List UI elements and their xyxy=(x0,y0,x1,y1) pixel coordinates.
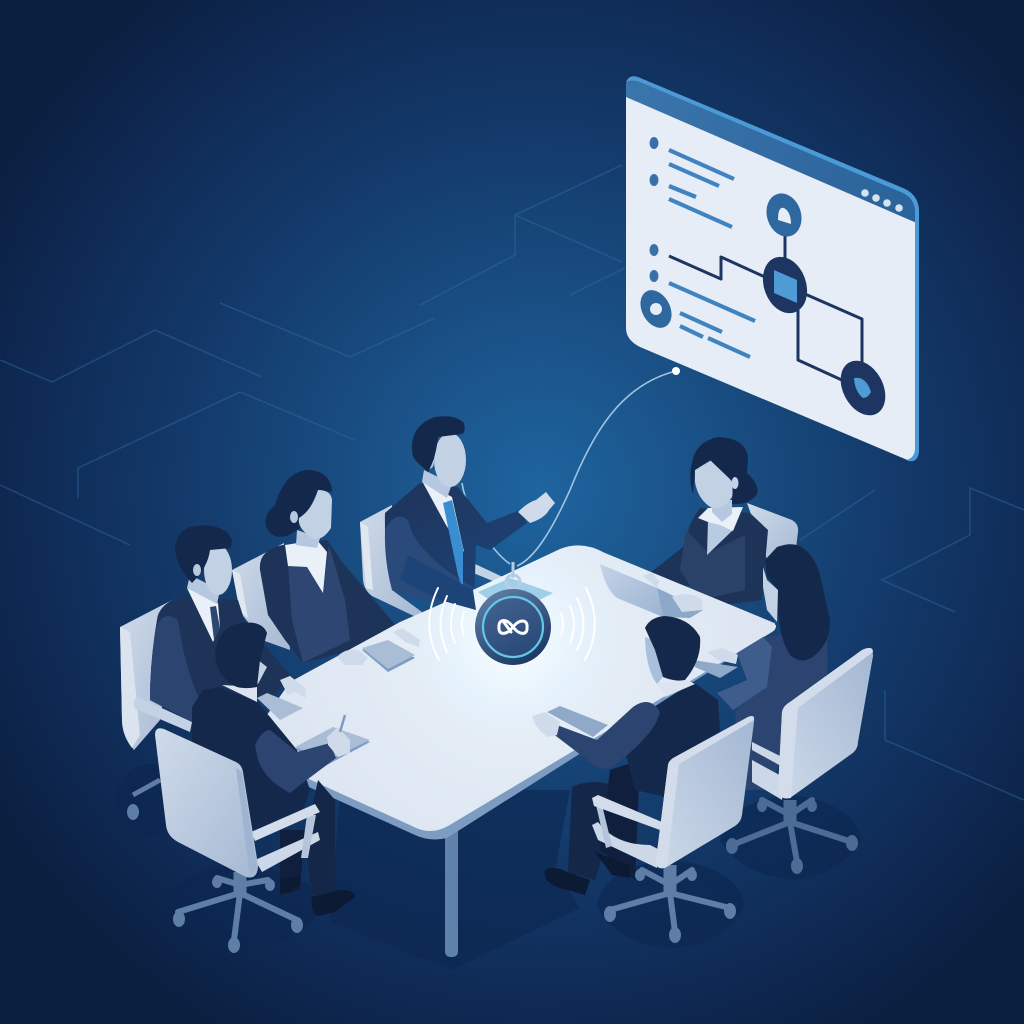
hand: right woman left xyxy=(643,572,659,588)
sound waves right xyxy=(561,588,595,660)
hair xyxy=(645,616,700,681)
node: center xyxy=(755,251,815,319)
armrest xyxy=(251,804,320,841)
legs xyxy=(305,780,335,895)
torso xyxy=(735,630,828,790)
face xyxy=(204,545,232,595)
shirt xyxy=(422,481,464,552)
legs xyxy=(568,782,620,880)
armrest xyxy=(592,795,662,830)
back xyxy=(656,716,754,868)
node: top xyxy=(761,189,807,241)
base xyxy=(178,872,297,940)
blouse xyxy=(707,520,733,555)
floor shadow under table xyxy=(330,790,580,970)
hand: left man xyxy=(280,676,306,698)
infinity symbol xyxy=(499,621,527,633)
laptop hands xyxy=(672,594,703,612)
connection wire xyxy=(462,367,680,566)
collar xyxy=(698,507,743,531)
table xyxy=(262,545,776,957)
neck xyxy=(222,685,257,702)
person: left man xyxy=(150,526,290,722)
node: bottom xyxy=(832,353,894,423)
laptop screen xyxy=(600,564,663,617)
seat xyxy=(255,832,320,872)
sound waves left xyxy=(429,588,464,660)
hair xyxy=(265,470,332,537)
armrest upright xyxy=(301,815,316,858)
person: center man xyxy=(385,416,555,608)
chair shadows xyxy=(116,764,862,950)
hand xyxy=(707,648,738,664)
torso xyxy=(150,597,290,722)
tablet: left man xyxy=(257,693,303,720)
laptop xyxy=(600,564,703,618)
screen panel xyxy=(626,76,919,461)
tablet: right woman xyxy=(693,660,738,678)
hand xyxy=(532,712,560,737)
notepad xyxy=(295,727,370,765)
tablet: left woman xyxy=(362,640,415,672)
shirt xyxy=(187,588,220,642)
arm xyxy=(552,702,660,769)
chair: near right man xyxy=(592,716,754,943)
table leg xyxy=(445,825,458,957)
window dots xyxy=(861,189,903,212)
laptop keyboard xyxy=(657,588,703,618)
armrest xyxy=(752,742,782,766)
person: long-haired woman xyxy=(707,544,830,790)
tablet: near right man xyxy=(547,706,608,737)
pendant body xyxy=(475,589,551,665)
face xyxy=(695,460,733,508)
collar xyxy=(285,540,327,593)
face xyxy=(245,660,267,684)
torso xyxy=(260,540,397,663)
table top xyxy=(262,545,776,831)
chair: near left man xyxy=(155,728,320,953)
arm xyxy=(255,730,336,793)
arm xyxy=(717,637,772,710)
center man forearm xyxy=(400,555,476,610)
hair xyxy=(765,544,830,660)
back xyxy=(155,728,258,878)
face xyxy=(763,567,778,622)
ear xyxy=(290,511,298,523)
chair: right woman xyxy=(747,503,798,562)
pendant glow xyxy=(434,558,542,608)
hair xyxy=(412,416,465,472)
hair xyxy=(690,437,758,504)
pendant device xyxy=(429,562,595,665)
torso xyxy=(192,687,310,830)
chair: center man xyxy=(360,505,505,618)
pen xyxy=(340,715,345,732)
hair xyxy=(175,526,232,583)
person: near right man xyxy=(532,616,722,895)
hair xyxy=(215,622,267,688)
tie xyxy=(210,606,220,640)
neck xyxy=(422,470,452,498)
base xyxy=(732,800,852,862)
screen title bar xyxy=(626,76,919,224)
hand xyxy=(518,492,555,523)
base xyxy=(610,865,730,932)
face xyxy=(434,433,466,487)
chair: left man xyxy=(120,597,192,820)
torso xyxy=(385,483,527,607)
pendant ring xyxy=(483,597,543,657)
tie xyxy=(443,500,463,590)
hand: left woman far xyxy=(393,628,420,647)
person: near left man xyxy=(192,622,355,916)
person: right woman xyxy=(650,437,768,608)
seat xyxy=(752,760,785,800)
pendant clasp xyxy=(506,562,520,589)
person: left woman xyxy=(260,470,397,663)
tablet under pendant xyxy=(478,578,553,605)
ear xyxy=(424,455,434,469)
left sleeve xyxy=(385,517,478,608)
hand: left woman near xyxy=(337,650,368,665)
wire end dot xyxy=(672,367,680,375)
bullet dots xyxy=(650,137,658,282)
cuff and hand xyxy=(327,727,350,757)
torso xyxy=(650,508,768,608)
ear xyxy=(732,477,738,489)
face xyxy=(299,490,332,539)
back xyxy=(778,648,873,798)
chair: long-haired woman xyxy=(726,648,873,874)
neck xyxy=(657,680,695,697)
chair: left woman xyxy=(232,543,382,650)
shoes xyxy=(280,875,355,916)
vest xyxy=(288,545,350,663)
neck xyxy=(712,500,732,522)
torso xyxy=(625,682,722,800)
neck xyxy=(187,575,220,604)
face xyxy=(645,637,663,684)
ear xyxy=(193,564,201,576)
armrest upright xyxy=(596,805,612,848)
flow connectors xyxy=(669,235,862,381)
seat xyxy=(592,822,660,868)
shoes xyxy=(545,852,630,895)
sleeve xyxy=(150,616,200,722)
presentation screen xyxy=(626,76,919,461)
vest xyxy=(680,530,745,600)
table edge xyxy=(290,622,775,839)
text lines xyxy=(669,150,755,357)
node: left xyxy=(634,285,678,333)
neck xyxy=(296,530,320,548)
